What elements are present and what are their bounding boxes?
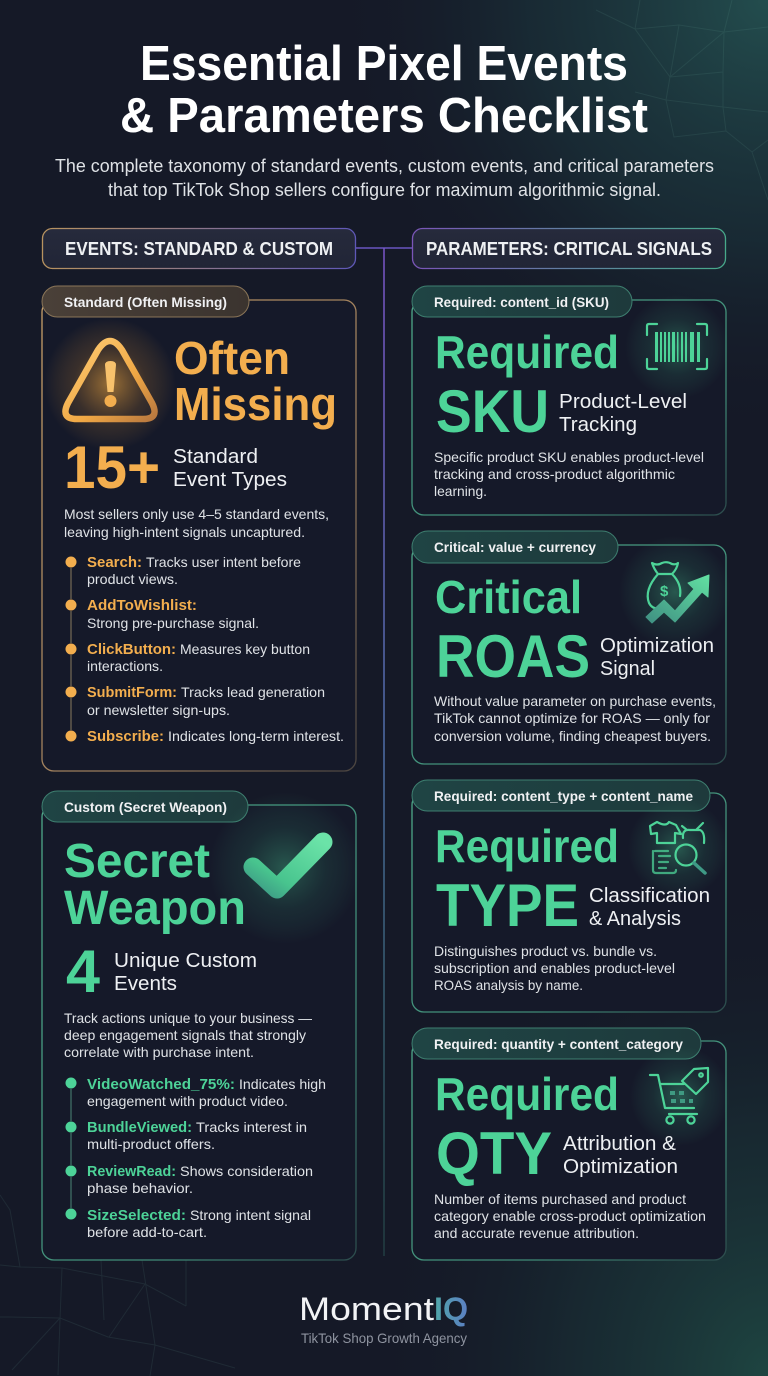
heading: often missing: Often — [174, 332, 290, 384]
list: custom events: ReviewRead: — [87, 1164, 176, 1180]
text: SKU description: learning. — [434, 483, 487, 499]
stat: TYPE: Classification — [589, 885, 710, 907]
stat: QTY: Attribution & — [563, 1133, 677, 1155]
subtitle — [55, 156, 714, 200]
text: ROAS description: TikTok cannot optimize for ROAS — only for — [434, 710, 710, 726]
header: parameters: PARAMETERS: CRITICAL SIGNALS — [426, 239, 712, 259]
title: Essential Pixel Events — [140, 37, 628, 91]
footer logo: MomentIQ: IQ — [434, 1291, 468, 1327]
panel: ROAS — [412, 531, 731, 764]
text: QTY description: Number of items purchased and product — [434, 1191, 686, 1207]
text: ROAS description: Without value parameter on purchase events, — [434, 693, 716, 709]
text: TYPE description: ROAS analysis by name. — [434, 977, 583, 993]
list: standard events: Tracks user intent before — [146, 554, 301, 570]
icon: warning triangle — [44, 318, 176, 450]
list: standard events: Search: — [87, 555, 142, 571]
list: custom events: Strong intent signal — [190, 1207, 311, 1223]
text: custom description: deep engagement signals that strongly — [64, 1027, 306, 1043]
tab: content_id — [412, 286, 632, 317]
tab: custom: Custom (Secret Weapon) — [64, 799, 227, 815]
stat: 15+ — [64, 434, 287, 501]
stat: ROAS: ROAS — [436, 623, 590, 690]
stat: SKU: Product-Level — [559, 391, 687, 413]
text: custom description: Track actions unique to your business — — [64, 1010, 312, 1026]
list: standard events: AddToWishlist: — [87, 598, 197, 614]
icon: shirt, gift, clipboard and magnifier — [628, 798, 728, 898]
stat: 4 — [66, 938, 257, 1005]
panel: custom events — [42, 791, 361, 1260]
stat: SKU: SKU — [436, 378, 549, 445]
stat: QTY: QTY — [436, 1120, 552, 1187]
list: custom events — [66, 1076, 326, 1240]
heading: required: Required — [435, 1068, 619, 1120]
panel: QTY — [412, 1028, 730, 1260]
list: standard events: Tracks lead generation — [181, 684, 325, 700]
icon: money bag and growth arrow: $ — [660, 583, 669, 600]
list: custom events: BundleViewed: — [87, 1120, 192, 1136]
stat: TYPE — [436, 872, 710, 939]
icon: shopping cart with tag — [630, 1046, 730, 1146]
subtitle: that top TikTok Shop sellers configure for maximum algorithmic signal. — [108, 180, 661, 200]
panel: standard events — [42, 286, 356, 771]
list: custom events: engagement with product video. — [87, 1093, 288, 1109]
heading: secret weapon: Secret — [64, 835, 210, 888]
tab: content_id: Required: content_id (SKU) — [434, 294, 609, 310]
title: & Parameters Checklist — [120, 89, 648, 143]
stat: ROAS: Signal — [600, 658, 655, 680]
list: standard events: interactions. — [87, 658, 163, 674]
list: standard events: product views. — [87, 571, 178, 587]
tab: content_type: Required: content_type + content_name — [434, 788, 693, 804]
header: events: EVENTS: STANDARD & CUSTOM — [65, 239, 333, 259]
heading: required: Required — [435, 820, 619, 872]
list: standard events: Subscribe: — [87, 729, 164, 745]
list: custom events: multi-product offers. — [87, 1136, 215, 1152]
tab: quantity — [412, 1028, 701, 1059]
text: ROAS description: conversion volume, finding cheapest buyers. — [434, 728, 711, 744]
heading: critical: Critical — [435, 571, 582, 623]
tab: value + currency: Critical: value + currency — [434, 539, 596, 555]
stat: TYPE: & Analysis — [589, 908, 681, 930]
icon: money bag and growth arrow — [619, 536, 731, 648]
list: custom events: SizeSelected: — [87, 1208, 186, 1224]
list: standard events: Measures key button — [180, 641, 310, 657]
tab: standard: Standard (Often Missing) — [64, 294, 227, 310]
heading: secret weapon — [64, 835, 246, 935]
list: custom events: before add-to-cart. — [87, 1224, 207, 1240]
stat: 15+: Event Types — [173, 469, 287, 491]
stat: 4: 4 — [66, 938, 101, 1005]
tab: value + currency — [412, 531, 618, 563]
list: standard events: SubmitForm: — [87, 685, 177, 701]
stat: TYPE: TYPE — [436, 872, 579, 939]
text: SKU description: Specific product SKU enables product-level — [434, 449, 704, 465]
text: ROAS description — [434, 693, 716, 744]
heading: often missing: Missing — [174, 378, 337, 430]
list: standard events: Indicates long-term interest. — [168, 728, 344, 744]
footer tagline: TikTok Shop Growth Agency — [301, 1330, 467, 1346]
list: standard events: ClickButton: — [87, 642, 176, 658]
stat: QTY — [436, 1120, 678, 1187]
stat: QTY: Optimization — [563, 1156, 678, 1178]
text: standard description: Most sellers only use 4–5 standard events, — [64, 506, 329, 522]
list: standard events — [66, 554, 344, 745]
text: standard description: leaving high-intent signals uncaptured. — [64, 524, 305, 540]
tab: content_type — [412, 780, 710, 811]
stat: 15+: 15+ — [64, 434, 160, 501]
text: TYPE description — [434, 943, 675, 993]
list: custom events: phase behavior. — [87, 1180, 193, 1196]
icon: check mark — [209, 792, 361, 944]
tab: custom — [42, 791, 248, 822]
footer logo: MomentIQ — [299, 1291, 468, 1327]
connector lines — [356, 248, 412, 1256]
stat: SKU: Tracking — [559, 414, 637, 436]
title — [120, 37, 648, 143]
text: custom description — [64, 1010, 312, 1060]
stat: ROAS — [436, 623, 714, 690]
list: standard events: Strong pre-purchase signal. — [87, 615, 259, 631]
text: SKU description — [434, 449, 704, 499]
footer logo: MomentIQ: Moment — [299, 1291, 434, 1327]
icon: barcode — [625, 295, 729, 399]
stat: 4: Events — [114, 973, 177, 995]
stat: SKU — [436, 378, 687, 445]
text: QTY description — [434, 1191, 706, 1241]
stat: 4: Unique Custom — [114, 950, 257, 972]
list: custom events: Tracks interest in — [196, 1119, 307, 1135]
text: TYPE description: Distinguishes product vs. bundle vs. — [434, 943, 657, 959]
text: QTY description: category enable cross-product optimization — [434, 1208, 706, 1224]
tab: quantity: Required: quantity + content_category — [434, 1036, 683, 1052]
subtitle: The complete taxonomy of standard events, custom events, and critical parameters — [55, 156, 714, 176]
text: standard description — [64, 506, 329, 540]
text: custom description: correlate with purchase intent. — [64, 1044, 254, 1060]
text: TYPE description: subscription and enables product-level — [434, 960, 675, 976]
heading: required: Required — [435, 326, 619, 378]
text: SKU description: tracking and cross-product algorithmic — [434, 466, 675, 482]
panel: SKU — [412, 286, 729, 515]
panel: TYPE — [412, 780, 728, 1012]
list: standard events: or newsletter sign-ups. — [87, 702, 230, 718]
header: events — [42, 228, 356, 268]
stat: 15+: Standard — [173, 446, 258, 468]
heading: secret weapon: Weapon — [64, 882, 246, 935]
header: parameters — [412, 228, 726, 268]
tab: standard — [42, 286, 249, 317]
list: custom events: Indicates high — [239, 1076, 326, 1092]
text: QTY description: and accurate revenue attribution. — [434, 1225, 639, 1241]
list: custom events: VideoWatched_75%: — [87, 1077, 235, 1093]
heading: often missing — [174, 332, 337, 430]
stat: ROAS: Optimization — [600, 635, 714, 657]
list: custom events: Shows consideration — [180, 1163, 313, 1179]
